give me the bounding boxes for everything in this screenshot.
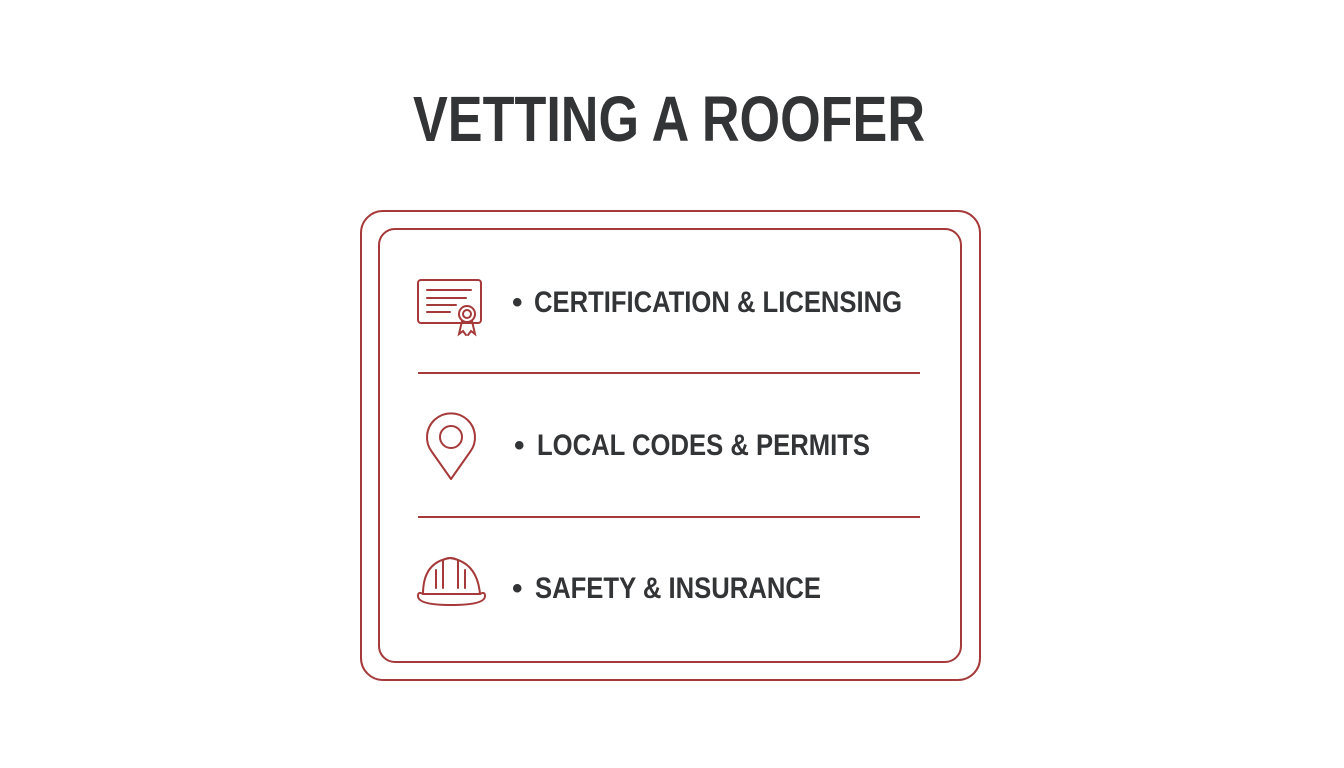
icon: location pin [427,413,475,479]
item 2 text: • [514,429,525,462]
icon: certificate [418,280,481,335]
icon: hard hat [418,558,485,605]
item 1 text: CERTIFICATION & LICENSING [534,286,902,319]
title: VETTING A ROOFER [413,83,925,155]
item 1 text: • [512,286,523,319]
item 3 text: • [512,572,523,605]
item 2 text: LOCAL CODES & PERMITS [537,429,870,462]
panel: checklist frame [361,211,980,680]
item 3 text: SAFETY & INSURANCE [535,572,821,605]
